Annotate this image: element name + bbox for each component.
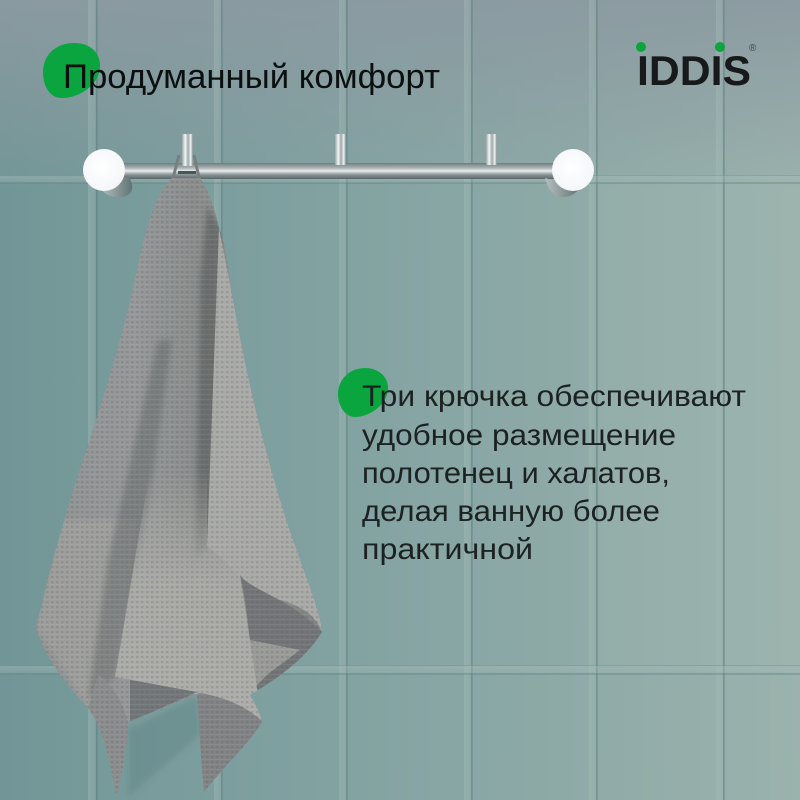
right end disc: [552, 149, 594, 191]
logo wordmark: IDDIS: [637, 47, 751, 94]
title: [43, 43, 440, 98]
inner drape shadow: [130, 680, 197, 722]
lower front light area: [38, 522, 114, 702]
grey waffle towel: [30, 155, 330, 800]
left fold shadow: [88, 340, 172, 700]
description text: Три крючка обеспечивают: [362, 380, 746, 413]
green blob behind title: [43, 43, 100, 98]
lower left tail: [88, 675, 128, 797]
title text: Продуманный комфорт: [63, 58, 440, 96]
hook 2: [335, 134, 346, 165]
logo dot 1: [636, 42, 646, 52]
towel hanging loop: [172, 155, 200, 182]
green blob behind description: [338, 368, 388, 417]
lower right tail: [197, 693, 262, 792]
description text: [362, 380, 746, 566]
rail bar: [118, 163, 563, 179]
waffle weave texture: [30, 170, 330, 800]
folded light panel: [207, 228, 322, 632]
towel body: [30, 170, 330, 800]
description text: удобное размещение: [362, 419, 676, 452]
towel rail with three hooks: [83, 134, 594, 197]
description text: практичной: [362, 533, 533, 566]
rear lower light band: [250, 640, 300, 690]
description text: делая ванную более: [362, 495, 660, 528]
description text: полотенец и халатов,: [362, 457, 670, 490]
hook 3: [486, 134, 497, 165]
logo dot 2: [715, 42, 725, 52]
registered mark: ®: [749, 43, 757, 54]
front draped panel: [115, 470, 262, 720]
hook 1: [182, 134, 193, 166]
right wall mount: [545, 178, 580, 197]
left end disc: [83, 149, 125, 191]
description callout: [338, 368, 746, 566]
left wall mount: [100, 176, 132, 197]
inner fold shadow: [195, 205, 222, 560]
rear dark underside: [240, 575, 322, 695]
IDDIS logo: [636, 42, 757, 94]
